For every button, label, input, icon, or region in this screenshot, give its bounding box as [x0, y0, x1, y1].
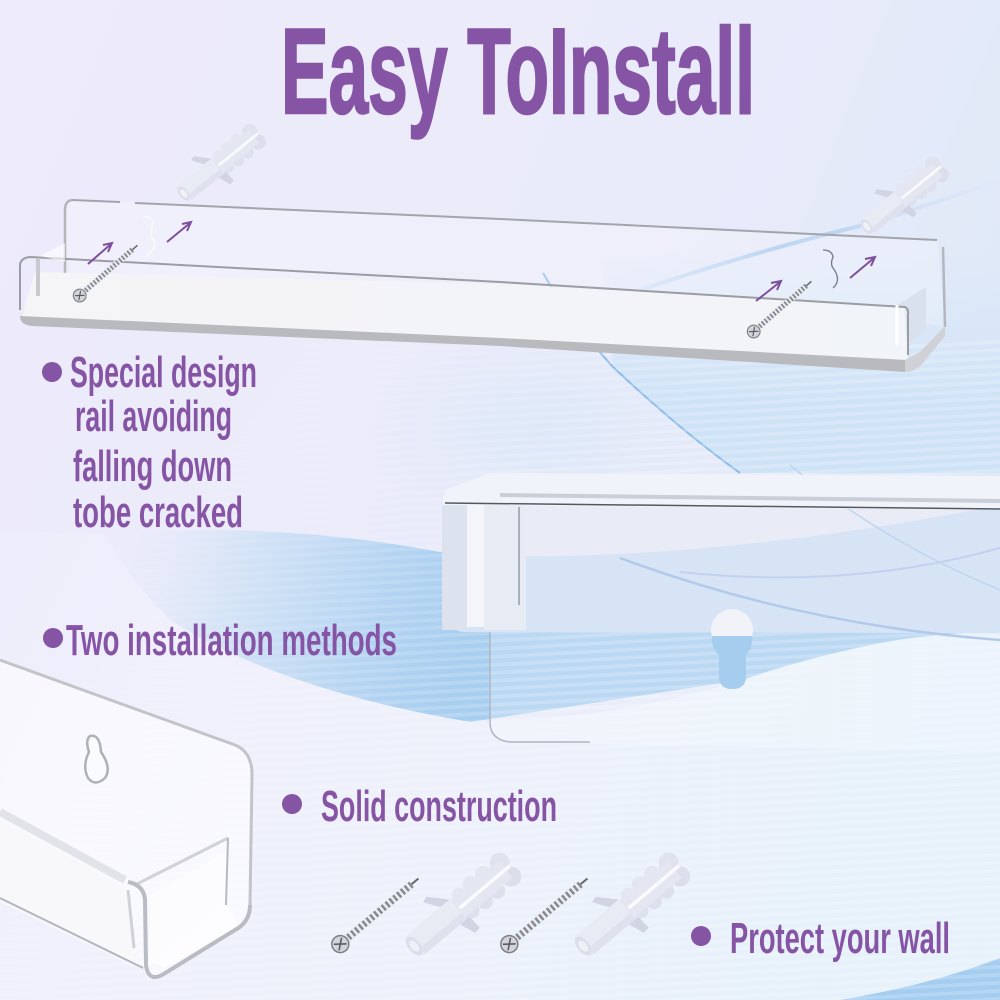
bullet: solid construction: Solid construction	[321, 782, 557, 831]
top anchor right	[849, 147, 957, 247]
keyhole slot left	[143, 217, 155, 257]
left-bottom shelf	[0, 660, 252, 979]
bullet: special design: Special design	[70, 348, 257, 397]
top screw left	[71, 241, 142, 305]
close-up shelf right	[442, 465, 1000, 752]
bottom screw 1	[328, 872, 424, 956]
bottom anchor 1	[390, 840, 532, 972]
bottom screw 2	[497, 872, 593, 956]
top anchor left	[166, 114, 274, 214]
bottom anchor 2	[559, 840, 701, 972]
arrow 3	[756, 281, 781, 301]
top acrylic shelf	[20, 200, 945, 372]
keyhole	[711, 609, 753, 689]
arrow 2	[167, 222, 191, 242]
arrow 4	[850, 257, 875, 278]
bullet: special design: tobe cracked	[73, 488, 243, 537]
arrow 1	[88, 243, 112, 264]
top screw right	[745, 277, 816, 341]
bullet: special design: rail avoiding	[75, 392, 232, 441]
keyhole	[85, 736, 108, 782]
bullet: two installation methods: Two installation methods	[66, 616, 397, 665]
bullet: special design: falling down	[73, 442, 232, 491]
keyhole slot right	[823, 250, 838, 288]
bullet: special design	[42, 348, 257, 537]
bullet: two installation methods	[43, 616, 397, 665]
bullet: solid construction	[282, 782, 557, 831]
